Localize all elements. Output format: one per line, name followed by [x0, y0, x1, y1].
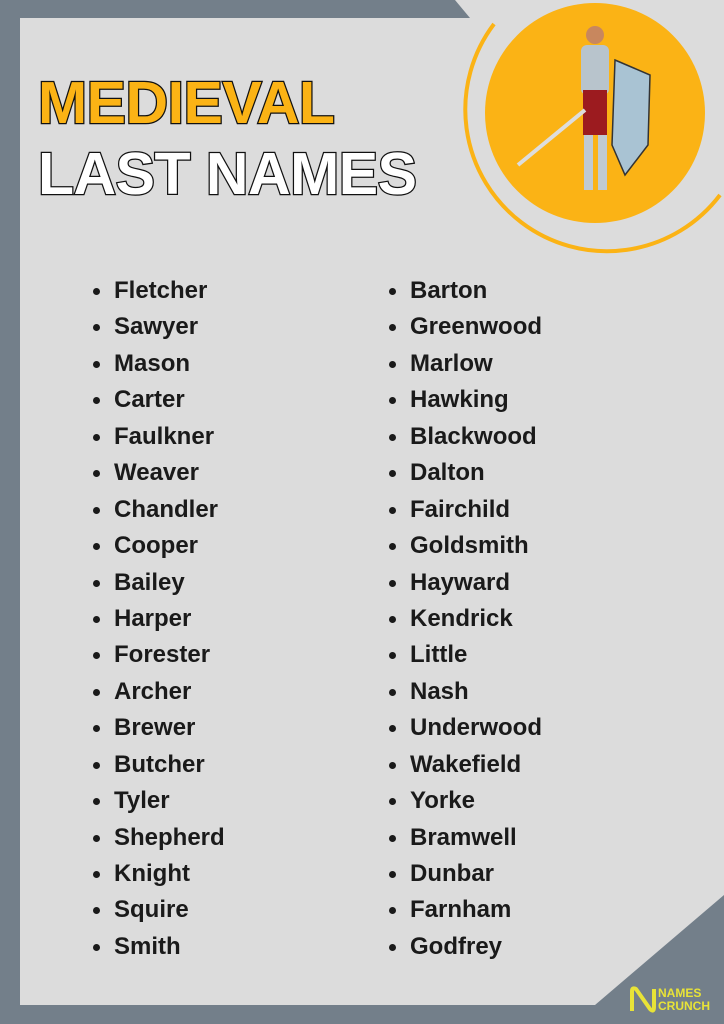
list: column 1: Tyler	[114, 787, 170, 814]
list: column 2: Little	[410, 641, 467, 668]
list: column 2: Yorke	[410, 787, 475, 814]
list: column 2: Barton	[410, 277, 487, 304]
logo: NAMES	[658, 986, 701, 1000]
list: column 2: Bramwell	[410, 824, 517, 851]
icon: knight in orange circle	[463, 3, 722, 254]
list: column 1: Squire	[114, 896, 189, 923]
list: column 1: Bailey	[114, 568, 185, 596]
list: column 1: Weaver	[114, 459, 199, 486]
list: column 2: Dunbar	[410, 860, 494, 887]
list: column 2: Marlow	[410, 350, 493, 377]
list: column 1: Faulkner	[114, 423, 214, 450]
list: column 1: Cooper	[114, 532, 198, 559]
list: column 2: Farnham	[410, 896, 511, 923]
list: column 1: Forester	[114, 641, 210, 668]
list: column 2: Greenwood	[410, 313, 542, 340]
list: column 2: Goldsmith	[410, 532, 529, 559]
logo: CRUNCH	[658, 999, 710, 1013]
list: column 2	[389, 277, 542, 960]
title	[38, 70, 416, 207]
list: column 1: Chandler	[114, 496, 218, 523]
list: column 1: Shepherd	[114, 824, 225, 851]
logo	[630, 986, 710, 1013]
list: column 2: Blackwood	[410, 423, 537, 450]
list: column 2: Wakefield	[410, 751, 521, 778]
list: column 1: Butcher	[114, 751, 205, 778]
list: column 1: Knight	[114, 860, 190, 887]
list: column 2: Hayward	[410, 568, 510, 596]
title: MEDIEVAL	[38, 70, 334, 136]
list: column 1: Fletcher	[114, 277, 207, 304]
list: column 2: Godfrey	[410, 933, 502, 960]
list: column 1: Brewer	[114, 714, 195, 741]
list: column 1: Archer	[114, 678, 191, 705]
list: column 1: Carter	[114, 386, 185, 413]
list: column 2: Fairchild	[410, 496, 510, 523]
list: column 2: Kendrick	[410, 605, 513, 632]
list: column 1: Harper	[114, 605, 191, 632]
list: column 1: Mason	[114, 350, 190, 377]
list: column 1: Sawyer	[114, 313, 198, 340]
list: column 2: Dalton	[410, 459, 485, 486]
title: LAST NAMES	[38, 141, 416, 207]
list: column 1: Smith	[114, 933, 181, 960]
list: column 2: Underwood	[410, 714, 542, 741]
list: column 2: Hawking	[410, 386, 509, 413]
list: column 2: Nash	[410, 678, 469, 705]
list: column 1	[93, 277, 225, 960]
